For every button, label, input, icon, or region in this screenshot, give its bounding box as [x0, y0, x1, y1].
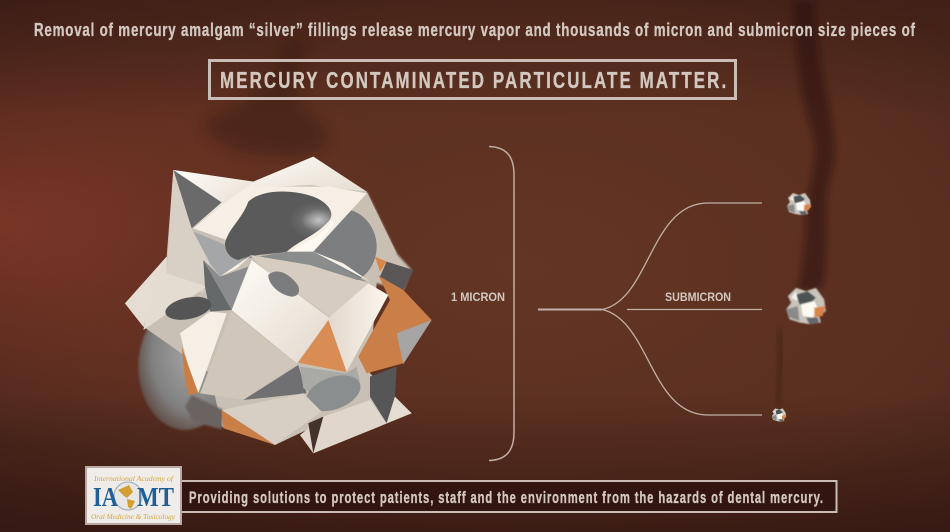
footer statement box — [176, 481, 836, 512]
IAOMT logo: IA — [93, 482, 118, 512]
footer statement box: Providing solutions to protect patients, staff and the environment from the hazards of dental mercury. — [189, 489, 823, 508]
1 micron bracket — [489, 146, 514, 460]
intro sentence: Removal of mercury amalgam “silver” fillings release mercury vapor and thousands of micron and submicron size pieces of — [34, 20, 915, 41]
lower left facets — [200, 312, 297, 400]
dark dome — [225, 191, 331, 260]
medium particle — [786, 288, 826, 324]
label: 1 micron: 1 MICRON — [451, 290, 505, 304]
label: submicron: SUBMICRON — [665, 290, 731, 304]
globe — [114, 482, 142, 510]
heading box: MERCURY CONTAMINATED PARTICULATE MATTER. — [220, 67, 726, 94]
orange faces on the right — [358, 275, 432, 373]
IAOMT logo: International Academy of — [93, 475, 174, 483]
silhouette base — [125, 157, 412, 453]
central facets — [232, 260, 330, 363]
upper white facets — [173, 170, 253, 228]
branching lines — [538, 203, 762, 415]
heading box — [210, 60, 736, 98]
tiny particle — [772, 408, 786, 422]
grey spheres behind the faces — [138, 303, 232, 430]
IAOMT logo: MT — [137, 482, 174, 512]
IAOMT logo — [86, 467, 181, 524]
small particle top — [787, 193, 811, 215]
large mercury particle — [125, 157, 432, 453]
IAOMT logo: Oral Medicine & Toxicology — [91, 513, 176, 521]
